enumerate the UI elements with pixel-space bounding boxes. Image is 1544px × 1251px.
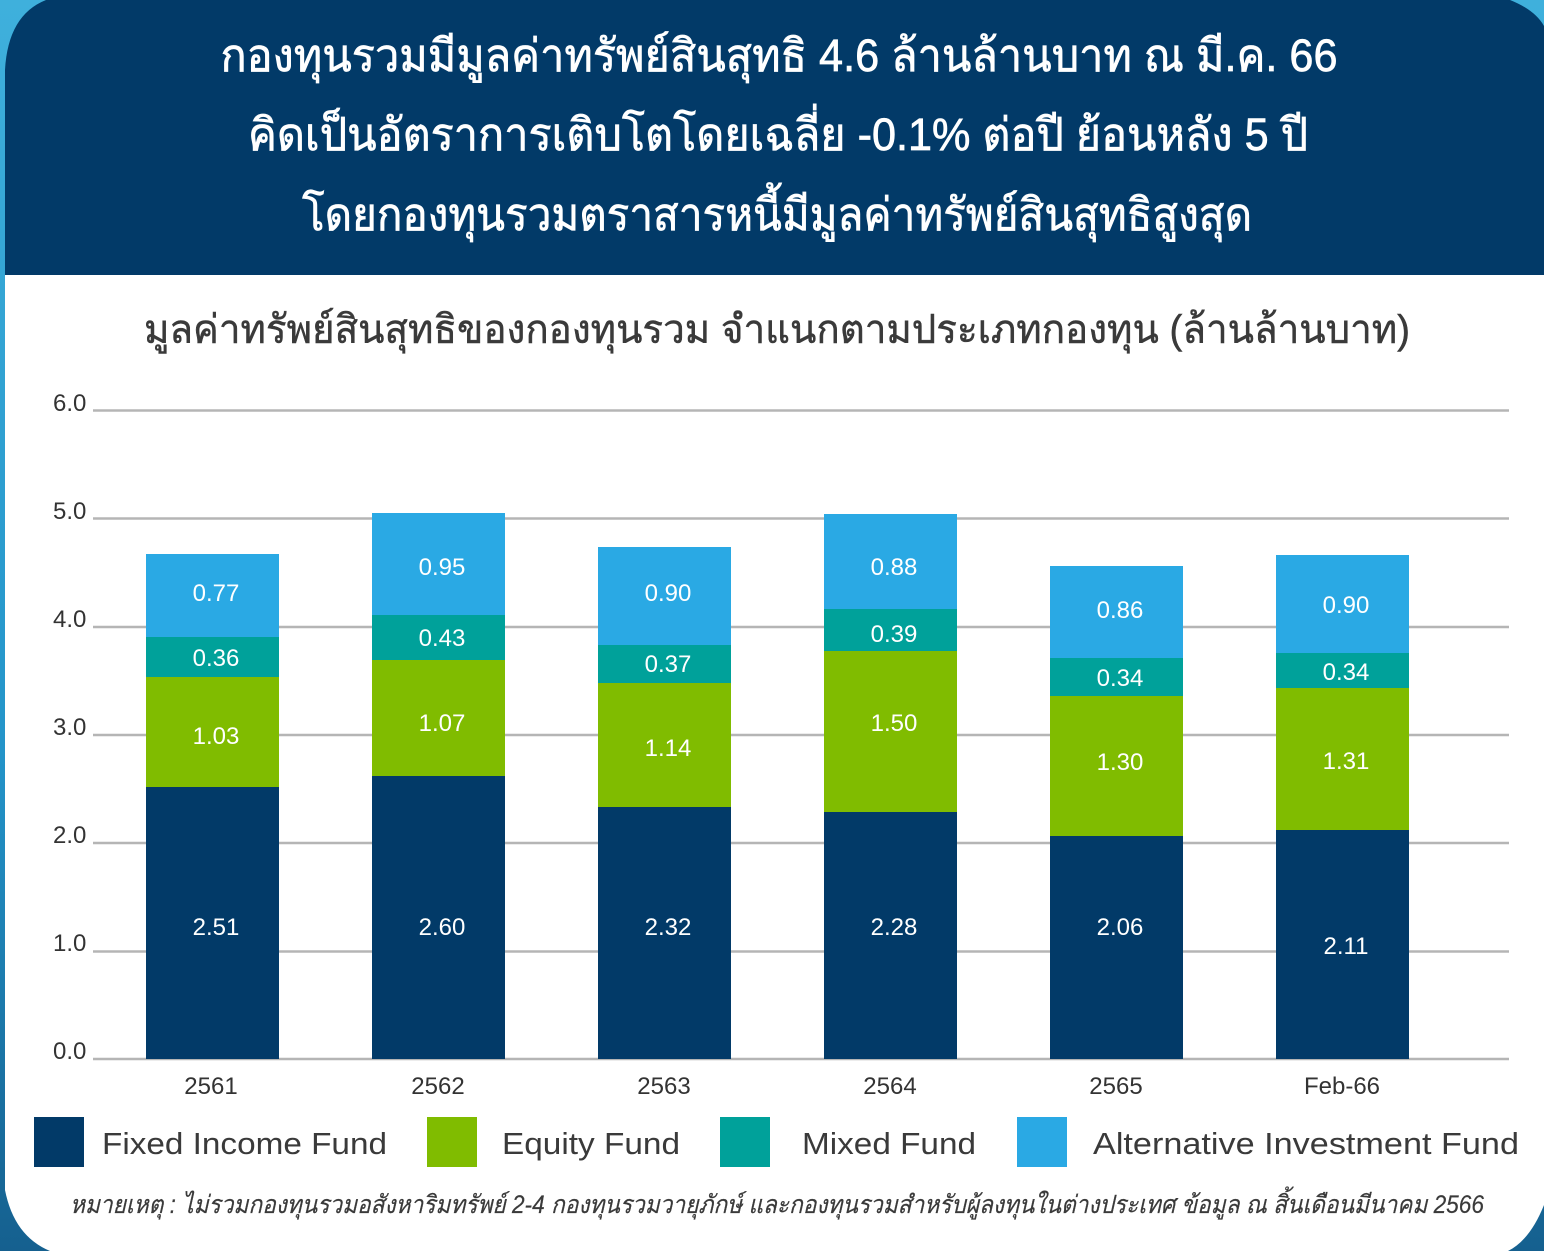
bar 2561: 1.03 — [193, 723, 239, 750]
bar 2561: 0.36 — [193, 645, 239, 672]
bar 2564: 2.28 — [871, 914, 917, 941]
title line 1: กองทุนรวมมีมูลค่าทรัพย์สินสุทธิ 4.6 ล้านล้านบาท ณ มี.ค. 66 — [220, 30, 1338, 83]
bar 2564 — [824, 514, 957, 1059]
legend: equity — [427, 1117, 680, 1167]
bar 2564: 0.88 — [871, 554, 917, 581]
x axis labels: 2563 — [637, 1073, 691, 1100]
x axis labels: 2561 — [184, 1073, 238, 1100]
bar 2561: 2.51 — [193, 914, 239, 941]
legend: mixed: Mixed Fund — [802, 1126, 976, 1161]
bar 2561: 0.77 — [193, 580, 239, 607]
y axis labels: 5.0 — [53, 498, 86, 525]
bar 2564: 0.39 — [871, 621, 917, 648]
y axis labels: 4.0 — [53, 606, 86, 633]
bar 2562: 0.95 — [419, 554, 465, 581]
bar Feb-66: 0.90 — [1323, 592, 1369, 619]
y axis labels — [53, 390, 86, 1065]
bar 2565: 0.86 — [1097, 597, 1143, 624]
bar Feb-66: 0.34 — [1323, 659, 1369, 686]
bar Feb-66: 2.11 — [1324, 933, 1368, 960]
legend: equity: Equity Fund — [502, 1126, 680, 1161]
x axis labels: 2564 — [863, 1073, 917, 1100]
legend: mixed — [720, 1117, 976, 1167]
bar 2562: 1.07 — [419, 710, 465, 737]
x axis labels: 2565 — [1089, 1073, 1143, 1100]
bar 2561 — [146, 554, 279, 1059]
legend — [34, 1117, 1519, 1167]
bar Feb-66: 1.31 — [1323, 748, 1369, 775]
bar 2565: 0.34 — [1097, 665, 1143, 692]
y axis labels: 2.0 — [53, 822, 86, 849]
x axis labels — [184, 1073, 1380, 1100]
bar 2562 — [372, 513, 505, 1059]
bar 2565: 2.06 — [1097, 914, 1143, 941]
bar 2565 — [1050, 566, 1183, 1059]
x axis labels: Feb-66 — [1304, 1073, 1380, 1100]
title line 2: คิดเป็นอัตราการเติบโตโดยเฉลี่ย -0.1% ต่อปี ย้อนหลัง 5 ปี — [248, 103, 1308, 160]
bar 2565: 1.30 — [1097, 749, 1143, 776]
y axis labels: 0.0 — [53, 1038, 86, 1065]
bar 2563: 0.90 — [645, 580, 691, 607]
bar 2563: 2.32 — [645, 914, 691, 941]
y axis labels: 1.0 — [53, 930, 86, 957]
bar 2563: 1.14 — [645, 735, 691, 762]
bar 2563 — [598, 547, 731, 1059]
x axis labels: 2562 — [411, 1073, 465, 1100]
legend: fixed income — [34, 1117, 387, 1167]
stacked bar chart — [53, 390, 1509, 1100]
bar 2562: 2.60 — [419, 914, 465, 941]
legend: fixed income: Fixed Income Fund — [102, 1126, 387, 1161]
title line 3: โดยกองทุนรวมตราสารหนี้มีมูลค่าทรัพย์สินสุทธิสูงสุด — [302, 182, 1252, 242]
y axis labels: 6.0 — [53, 390, 86, 417]
bar 2564: 1.50 — [871, 710, 917, 737]
header banner — [5, 0, 1544, 275]
bar Feb-66 — [1276, 555, 1409, 1059]
legend: alternative — [1017, 1117, 1519, 1167]
bar 2563: 0.37 — [645, 651, 691, 678]
bar 2562: 0.43 — [419, 625, 465, 652]
legend: alternative: Alternative Investment Fund — [1093, 1126, 1519, 1161]
chart title: มูลค่าทรัพย์สินสุทธิของกองทุนรวม จำแนกตามประเภทกองทุน (ล้านล้านบาท) — [144, 307, 1410, 354]
y axis labels: 3.0 — [53, 714, 86, 741]
